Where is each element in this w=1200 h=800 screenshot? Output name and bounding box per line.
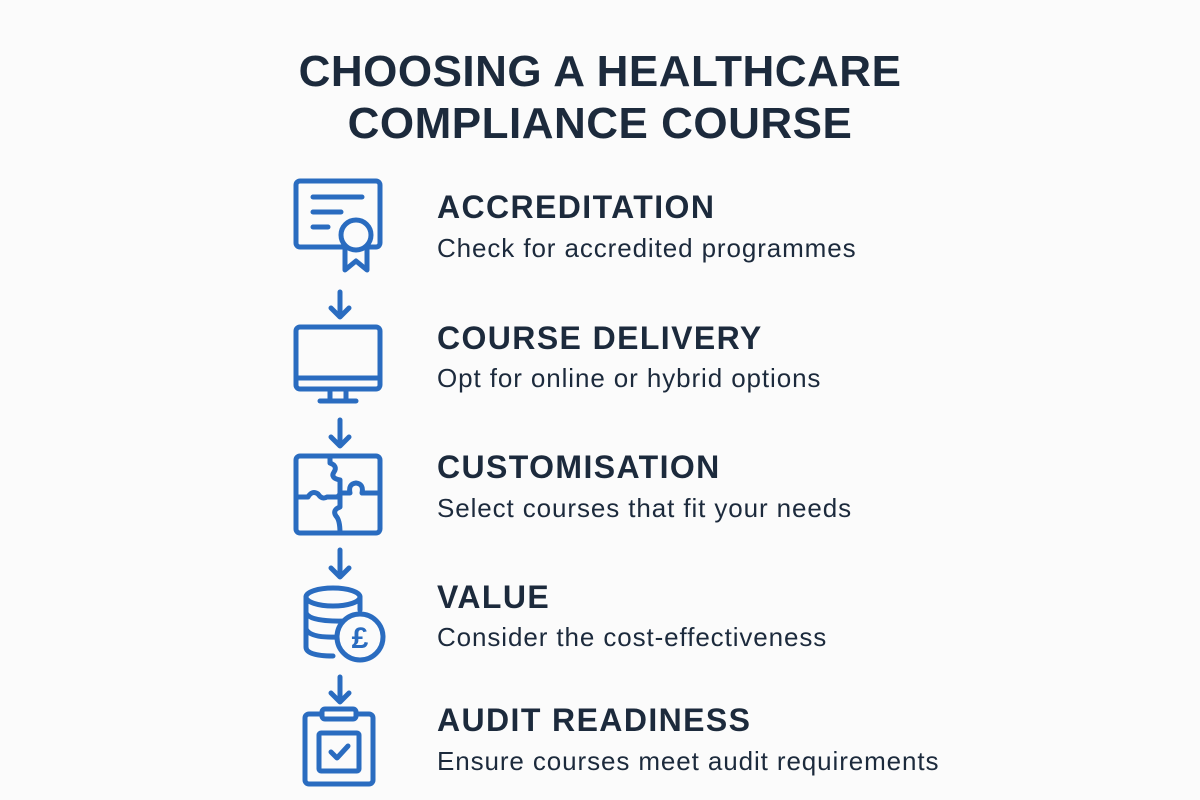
icon: puzzle [296, 456, 380, 533]
text: Consider the cost-effectiveness [437, 622, 827, 652]
icon: monitor [296, 327, 380, 401]
title: COMPLIANCE COURSE [348, 99, 852, 148]
text: ACCREDITATION [437, 189, 715, 225]
text: Ensure courses meet audit requirements [437, 746, 939, 776]
arrow 1 [331, 292, 349, 317]
step 4 [437, 579, 827, 652]
icon: coins: £ [352, 622, 369, 655]
step 1 [437, 189, 856, 263]
step 2 [437, 320, 821, 393]
title: CHOOSING A HEALTHCARE [299, 47, 901, 96]
text: COURSE DELIVERY [437, 320, 763, 356]
arrow 4 [331, 677, 349, 702]
text: Select courses that fit your needs [437, 493, 852, 523]
title [299, 47, 901, 148]
text: AUDIT READINESS [437, 702, 751, 738]
arrow 3 [331, 550, 349, 577]
text: Check for accredited programmes [437, 233, 856, 263]
arrow 2 [331, 420, 349, 446]
text: Opt for online or hybrid options [437, 363, 821, 393]
step 3 [437, 449, 852, 523]
text: VALUE [437, 579, 550, 615]
text: CUSTOMISATION [437, 449, 721, 485]
icon: clipboard [305, 709, 373, 784]
icon: coins [306, 588, 383, 660]
icon: certificate [296, 181, 380, 270]
step 5 [437, 702, 939, 776]
